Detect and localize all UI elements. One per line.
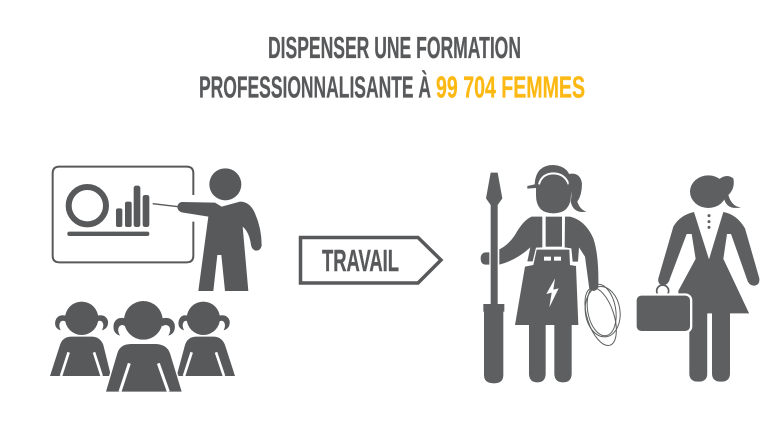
legs: [529, 325, 572, 382]
highlighted figure: 99 704 FEMMES: [436, 70, 585, 104]
board frame: [53, 167, 193, 262]
apron pockets: [544, 257, 561, 261]
bar chart: [116, 186, 149, 227]
bib strap: [546, 217, 562, 247]
icon: woman electrician with screwdriver: [481, 165, 623, 383]
icon: businesswoman with briefcase: [637, 175, 759, 384]
chart baseline: [67, 232, 149, 236]
legs: [689, 308, 730, 382]
left girl: [50, 302, 111, 376]
helmet and head: [527, 165, 571, 213]
head: [690, 175, 727, 208]
right girl: [177, 302, 235, 376]
hand: [481, 252, 489, 265]
cable coil: [579, 282, 623, 349]
ponytail: [569, 174, 587, 212]
icon: presentation board with trainer: [53, 167, 262, 291]
pointer: [153, 204, 178, 207]
apron: [515, 250, 578, 325]
centre girl: [106, 301, 182, 392]
arrow outline: [300, 238, 441, 283]
briefcase: [637, 296, 690, 331]
right arm and shoulder: [565, 217, 598, 291]
jacket buttons: [707, 214, 710, 229]
gap between legs: [707, 314, 712, 384]
screwdriver: [483, 173, 504, 383]
title line 1: DISPENSER UNE FORMATION: [268, 31, 521, 65]
left arm and shoulder: [499, 217, 542, 265]
trainer body: [177, 202, 262, 291]
helmet band: [539, 173, 569, 184]
ring chart: [69, 187, 106, 224]
arrow label: travail: [300, 238, 441, 283]
briefcase handle: [657, 285, 669, 297]
title line 2: PROFESSIONNALISANTE À: [199, 70, 431, 104]
lightning bolt: [546, 278, 559, 307]
dress and arms: [658, 212, 759, 313]
trainer head: [209, 168, 241, 200]
title: [199, 31, 585, 104]
icon: three girls: [50, 301, 235, 392]
ponytail: [719, 176, 741, 208]
arrow text: TRAVAIL: [322, 243, 399, 278]
